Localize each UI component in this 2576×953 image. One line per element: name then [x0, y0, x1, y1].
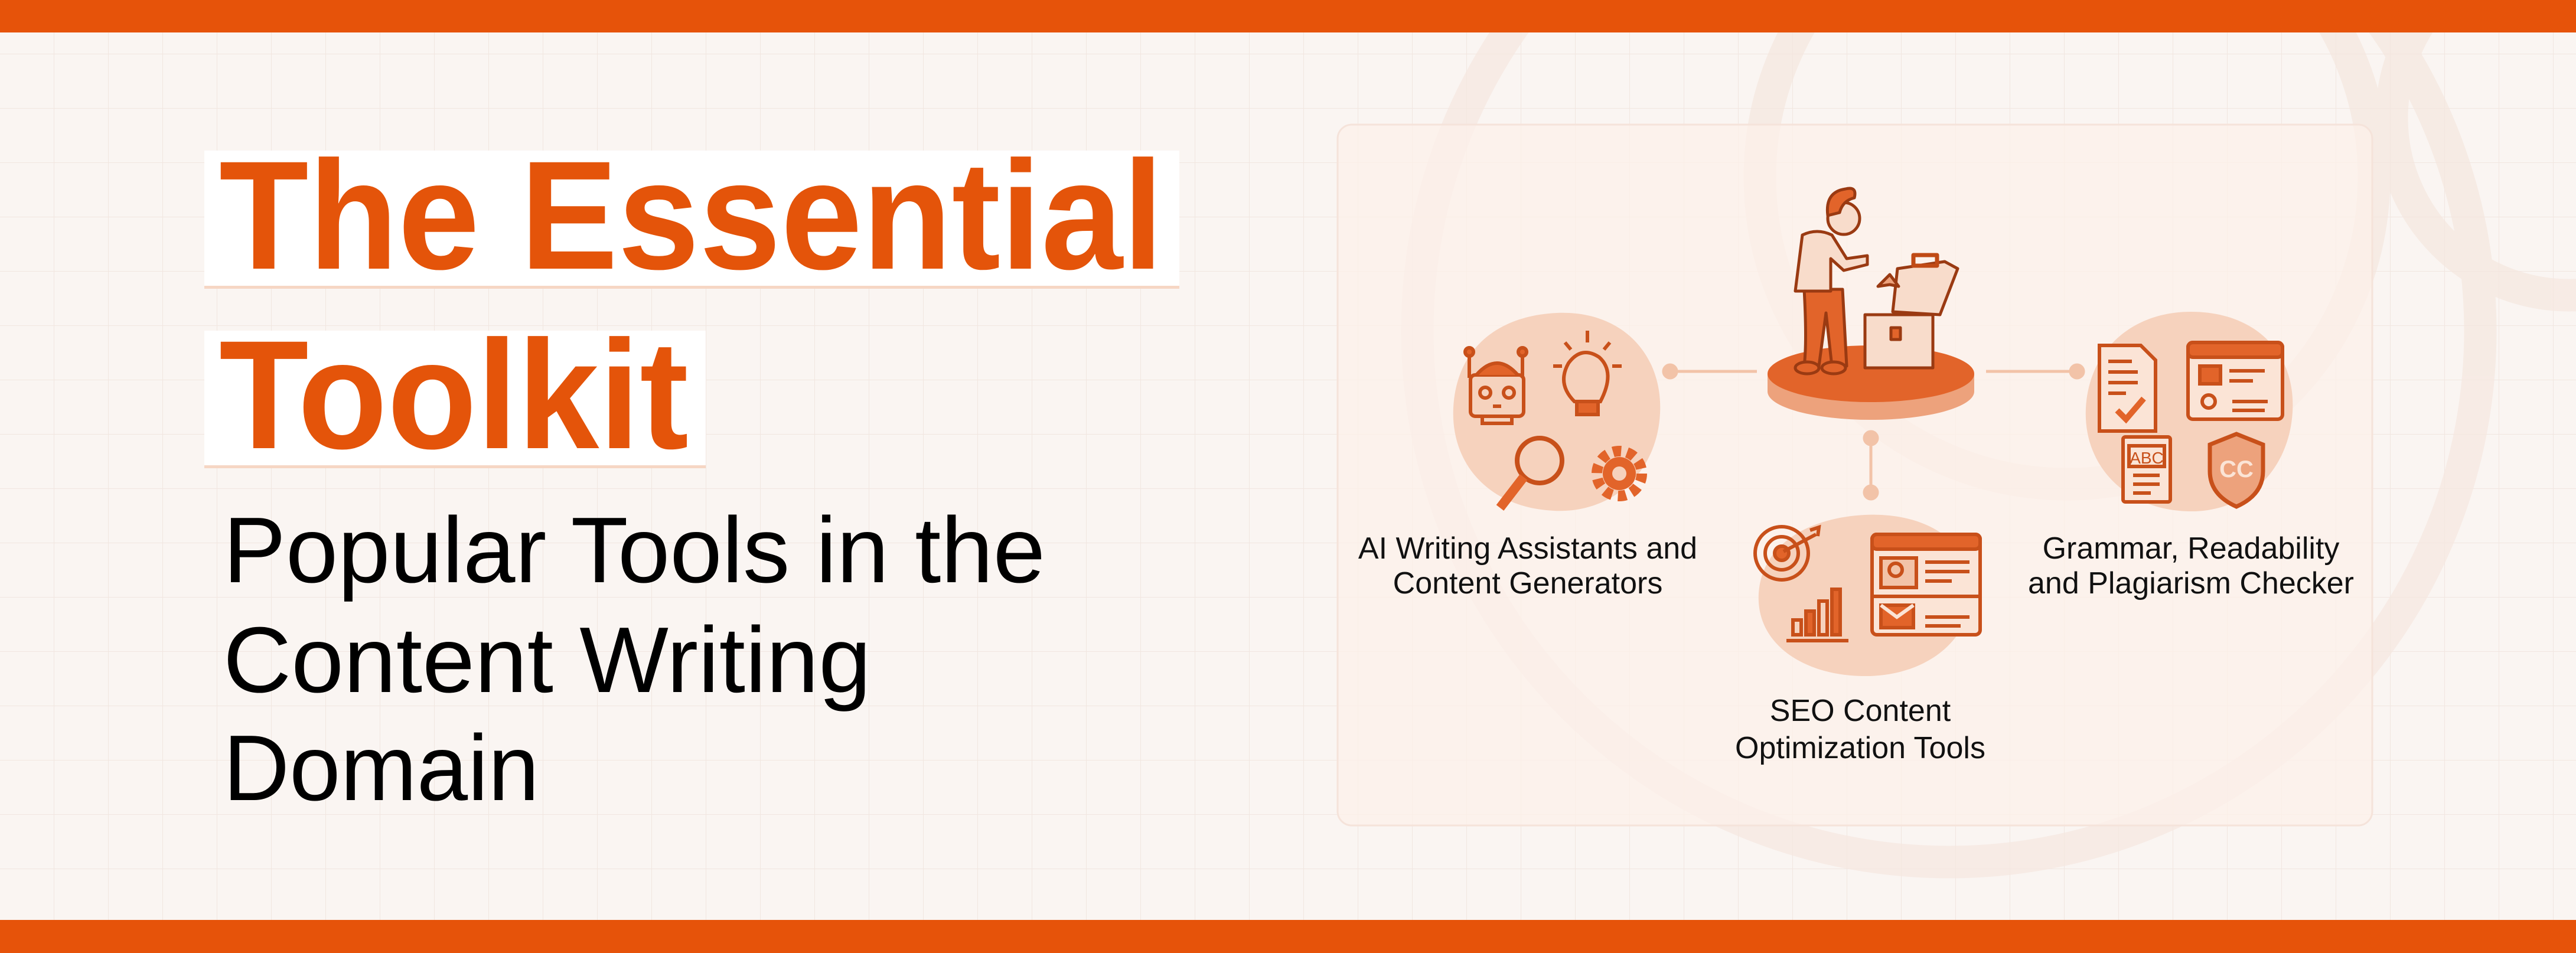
label: grammar: and Plagiarism Checker — [2028, 566, 2354, 600]
label: grammar: Grammar, Readability — [2043, 531, 2339, 566]
icon: shield: CC — [2219, 456, 2254, 482]
icon: magnifier — [1500, 438, 1562, 508]
bottom bar — [0, 920, 2576, 953]
top bar — [0, 0, 2576, 32]
subtitle: Popular Tools in the — [223, 498, 1045, 602]
icon: ABC book — [2123, 437, 2170, 502]
subtitle: Content Writing — [223, 608, 871, 712]
icon: shield — [2210, 434, 2263, 507]
icon: target — [1755, 527, 1819, 580]
label: SEO — [1735, 694, 1985, 765]
label: AI writing: Content Generators — [1393, 566, 1662, 600]
subtitle — [223, 498, 1045, 820]
title line 2: Toolkit — [219, 308, 689, 481]
label: AI writing — [1358, 531, 1697, 600]
icon: browser search — [2188, 342, 2282, 419]
subtitle: Domain — [223, 716, 539, 820]
icon: robot — [1465, 348, 1527, 423]
icon: gear — [1597, 451, 1642, 496]
icon: SEO browser — [1872, 534, 1980, 635]
panel: toolkit diagram — [1338, 125, 2372, 825]
label: SEO: Optimization Tools — [1735, 731, 1985, 765]
center illustration: person with toolbox — [1768, 188, 1974, 420]
title line 1: The Essential — [219, 129, 1163, 302]
icon: ABC book: ABC — [2130, 449, 2164, 467]
blob: grammar — [2086, 312, 2293, 511]
blob: AI writing — [1453, 313, 1660, 511]
icon: bulb — [1553, 331, 1622, 415]
label: grammar — [2028, 531, 2354, 600]
icon: bar chart — [1786, 589, 1848, 641]
label: SEO: SEO Content — [1770, 694, 1951, 728]
connectors — [1664, 365, 2083, 499]
blob: SEO — [1755, 515, 1980, 676]
icon: document check — [2099, 345, 2156, 431]
label: AI writing: AI Writing Assistants and — [1358, 531, 1697, 566]
